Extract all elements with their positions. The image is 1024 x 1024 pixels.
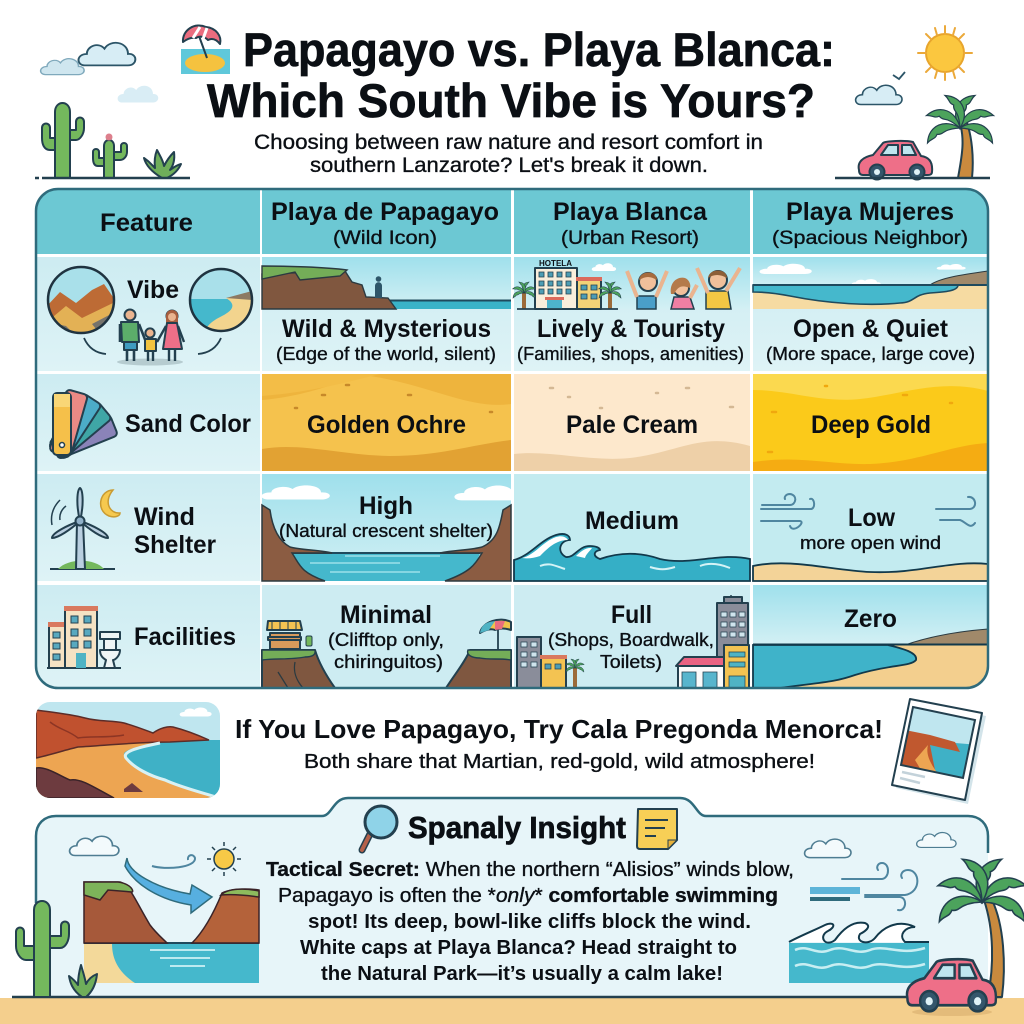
insight paragraph: White caps at Playa Blanca? Head straight to xyxy=(300,936,737,959)
swatch: pale cream xyxy=(514,374,750,471)
icon: beach umbrella xyxy=(181,25,230,74)
insight paragraph: Tactical Secret: When the northern “Alisios” winds blow, xyxy=(266,858,794,881)
title xyxy=(207,23,835,127)
illustration: boardwalk buildings: (Shops, Boardwalk, xyxy=(548,629,714,650)
label: facilities: Facilities xyxy=(134,623,236,651)
label: sand color: Sand Color xyxy=(125,410,251,438)
illustration: cactus and agave xyxy=(16,901,97,997)
illustration: sheltered cove: High xyxy=(359,492,413,520)
insight paragraph xyxy=(266,858,794,985)
label: wind shelter xyxy=(134,507,216,553)
illustration: pink car xyxy=(907,959,996,1016)
label: wild and mysterious: (Edge of the world, silent) xyxy=(276,344,496,364)
label: open and quiet xyxy=(766,315,975,364)
illustration: boardwalk buildings: Full xyxy=(611,601,652,629)
row: facilities xyxy=(36,585,988,688)
label: wild and mysterious xyxy=(276,315,496,364)
illustration: open beach xyxy=(753,257,988,309)
subtitle: Choosing between raw nature and resort comfort in xyxy=(254,131,763,154)
swatch: pale cream: Pale Cream xyxy=(566,411,698,439)
label: wind shelter: Shelter xyxy=(134,531,216,559)
icon: wind turbine and moon xyxy=(50,488,120,569)
icon: polaroid photo xyxy=(892,699,986,804)
header illustration: sun, cloud, palm, car xyxy=(835,26,997,180)
swatch: golden ochre: Golden Ochre xyxy=(307,411,466,439)
icon: family xyxy=(84,310,221,366)
ground strip xyxy=(0,997,1024,1024)
table header row xyxy=(36,189,988,254)
table header row: Playa Blanca xyxy=(553,198,708,226)
label: open and quiet: Open & Quiet xyxy=(793,315,949,343)
illustration: natural beach: Zero xyxy=(844,605,897,633)
label: open and quiet: (More space, large cove) xyxy=(766,344,975,364)
insight paragraph: the Natural Park—it’s usually a calm lake! xyxy=(321,962,723,985)
illustration: medium wave: Medium xyxy=(585,507,679,535)
illustration: wind and waves xyxy=(789,833,956,983)
label: lively and touristy xyxy=(517,315,744,364)
illustration: cliffs, wind arrow and sun xyxy=(70,836,259,983)
subtitle: southern Lanzarote? Let's break it down. xyxy=(310,154,708,177)
table header row: Playa de Papagayo xyxy=(271,198,499,226)
callout text: If You Love Papagayo, Try Cala Pregonda Menorca! xyxy=(235,714,883,744)
icon: magnifier xyxy=(362,806,397,850)
illustration: clifftop stalls: (Clifftop only, xyxy=(328,629,444,650)
subtitle xyxy=(254,131,763,177)
illustration: clifftop stalls: chiringuitos) xyxy=(334,651,443,672)
label: wild and mysterious: Wild & Mysterious xyxy=(282,315,491,343)
icon: note xyxy=(637,809,677,849)
table header row: Feature xyxy=(100,209,193,237)
illustration: boardwalk buildings xyxy=(514,585,750,688)
illustration: palm tree xyxy=(933,853,1024,997)
table header row: (Spacious Neighbor) xyxy=(772,228,968,249)
label: lively and touristy: Lively & Touristy xyxy=(537,315,725,343)
illustration: natural beach xyxy=(753,585,988,688)
illustration: boardwalk buildings: Toilets) xyxy=(600,651,662,672)
illustration: papagayo cliff edge xyxy=(262,257,511,309)
icon: canyon circle xyxy=(47,266,115,334)
row: sand color xyxy=(36,374,988,471)
insight paragraph: Papagayo is often the * only* comfortable swimming xyxy=(278,884,778,907)
illustration: open beach with wind: Low xyxy=(848,504,896,532)
table header row: (Wild Icon) xyxy=(333,228,437,249)
swatch: deep gold: Deep Gold xyxy=(811,411,931,439)
swatch: deep gold xyxy=(753,374,988,471)
table header row: Playa Mujeres xyxy=(786,198,954,226)
heading: spanaly insight: Spanaly Insight xyxy=(408,810,626,845)
illustration: open beach with wind xyxy=(753,474,988,581)
illustration: hotel and happy tourists xyxy=(511,257,750,309)
icon: buildings and toilet xyxy=(47,606,121,668)
label: lively and touristy: (Families, shops, amenities) xyxy=(517,344,744,364)
row: vibe xyxy=(36,257,988,371)
illustration: clifftop stalls: Minimal xyxy=(340,601,432,629)
panel: insight xyxy=(0,798,1024,1024)
panel: comparison table xyxy=(36,189,988,688)
header illustration: left clouds and cacti xyxy=(35,43,190,178)
callout text xyxy=(235,714,883,773)
swatch: golden ochre xyxy=(262,374,511,471)
icon: beach circle xyxy=(190,269,252,333)
illustration: open beach with wind: more open wind xyxy=(800,533,941,553)
illustration: medium wave xyxy=(514,474,750,581)
icon: color swatch fan xyxy=(48,389,118,460)
row: wind shelter xyxy=(36,474,988,581)
illustration: sheltered cove xyxy=(261,474,521,581)
callout illustration: red-gold beach xyxy=(36,702,220,798)
table header row: (Urban Resort) xyxy=(561,228,699,249)
callout text: Both share that Martian, red-gold, wild atmosphere! xyxy=(304,751,815,773)
title: Which South Vibe is Yours? xyxy=(207,74,815,127)
illustration: clifftop stalls xyxy=(262,585,511,688)
label: vibe: Vibe xyxy=(127,276,179,304)
label: wind shelter: Wind xyxy=(134,503,195,531)
illustration: sheltered cove: (Natural crescent shelter) xyxy=(279,521,493,541)
insight paragraph: spot! Its deep, bowl-like cliffs block the wind. xyxy=(308,910,751,933)
title: Papagayo vs. Playa Blanca: xyxy=(243,23,835,76)
illustration: hotel and happy tourists: HOTELA xyxy=(539,259,572,268)
